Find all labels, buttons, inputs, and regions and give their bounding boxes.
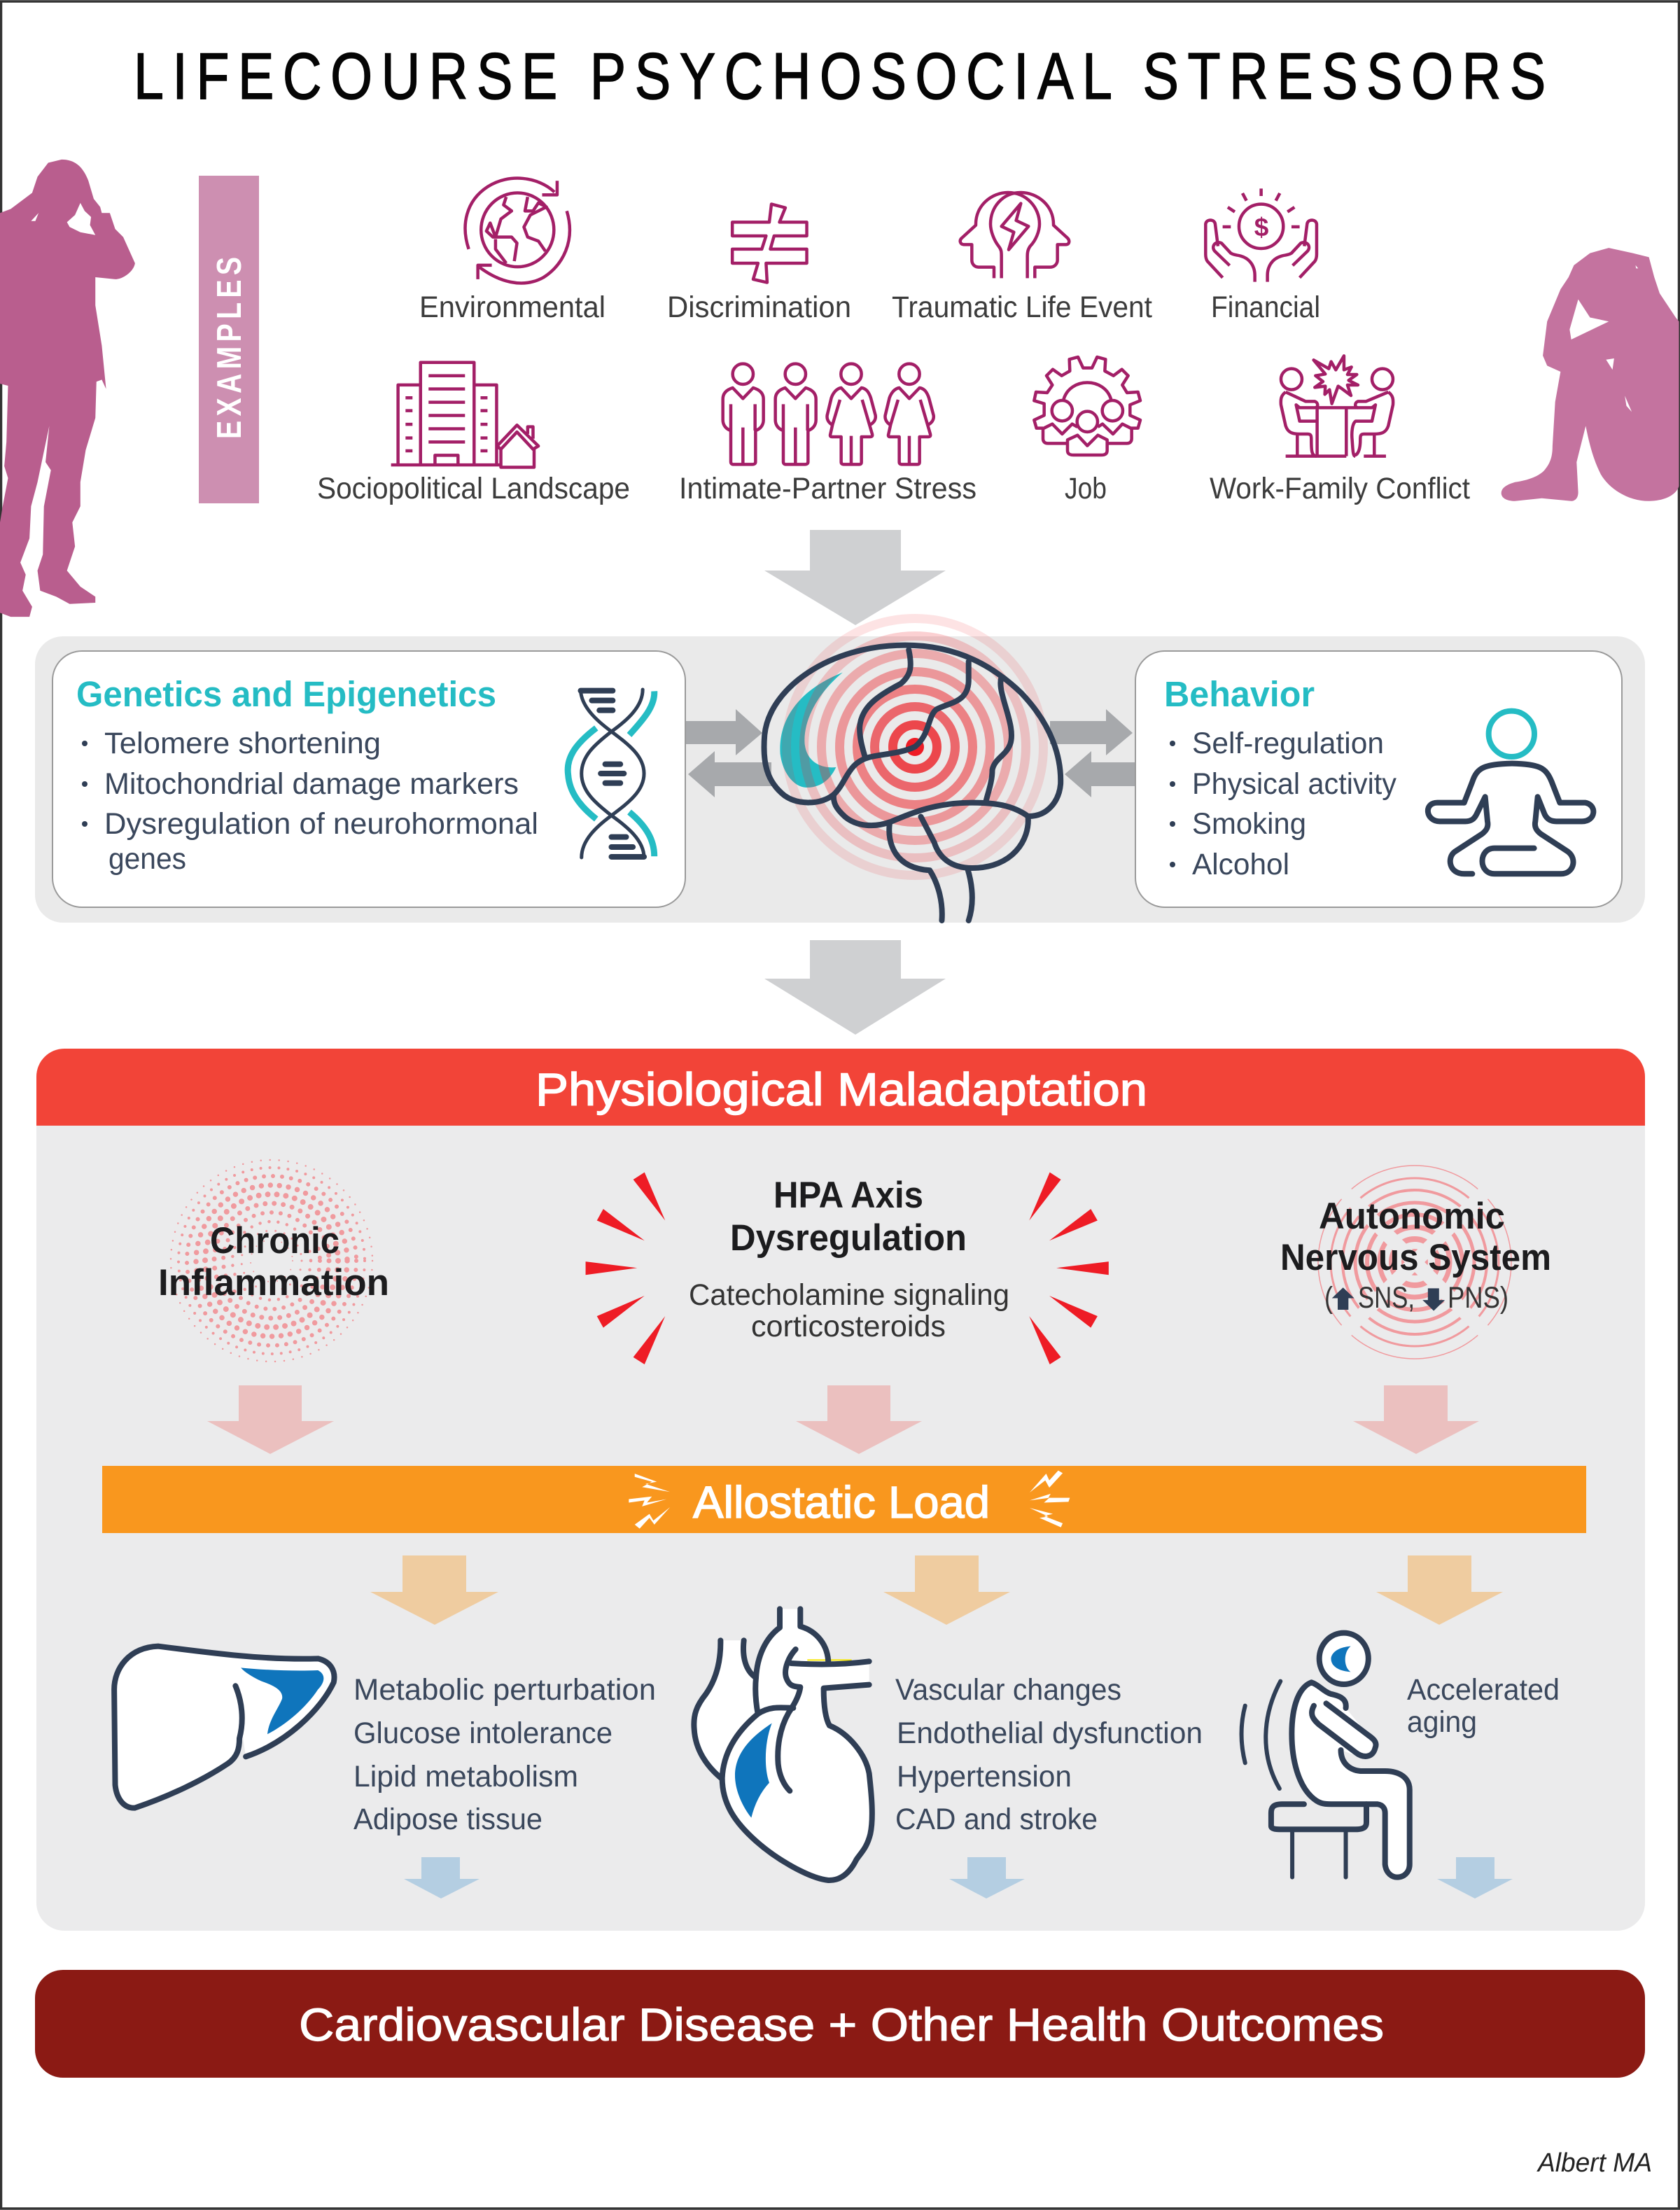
card: genetics and epigenetics [52, 651, 685, 907]
autonomic nervous system: ( [1324, 1281, 1334, 1315]
text: metabolic outcomes: Glucose intolerance [354, 1716, 612, 1750]
text: vascular outcomes [895, 1673, 1203, 1836]
hpa axis dysregulation: Dysregulation [730, 1217, 967, 1259]
list: behavior: Smoking [1192, 807, 1306, 841]
arrow: mediators to maladaptation [764, 940, 946, 1035]
icon: traumatic life event [960, 193, 1069, 278]
silhouette: standing person [0, 160, 135, 617]
arrows: to cardiovascular disease [404, 1857, 1513, 1898]
text: vascular outcomes: Hypertension [897, 1760, 1072, 1793]
hpa axis dysregulation [586, 1173, 1109, 1364]
heading: physiological maladaptation: Physiological Maladaptation [536, 1063, 1147, 1115]
label: financial: Financial [1211, 291, 1320, 324]
card: behavior [1135, 651, 1622, 907]
text: vascular outcomes: Endothelial dysfunction [897, 1716, 1203, 1750]
label: traumatic life event: Traumatic Life Event [892, 291, 1152, 324]
list: genetics [82, 727, 538, 876]
text: metabolic outcomes: Metabolic perturbation [354, 1673, 656, 1707]
autonomic nervous system: SNS, [1358, 1281, 1415, 1315]
icon: intimate-partner stress [723, 364, 934, 464]
up and down arrows [1332, 1287, 1445, 1310]
silhouette: seated person [1502, 248, 1679, 501]
icon: meditating person [1428, 711, 1593, 874]
label: work-family conflict: Work-Family Conflict [1210, 472, 1470, 505]
autonomic nervous system [1280, 1166, 1551, 1359]
header bar [36, 1049, 1645, 1126]
pulse rings [1318, 1166, 1511, 1359]
allostatic load band: Allostatic Load [693, 1477, 990, 1527]
icon: financial [1205, 188, 1317, 282]
label: discrimination: Discrimination [667, 291, 851, 324]
credit: Albert MA [1536, 2148, 1652, 2178]
list: behavior: Physical activity [1192, 767, 1396, 801]
heading: behavior: Behavior [1164, 674, 1315, 714]
list: behavior: Alcohol [1192, 848, 1289, 881]
title: LIFECOURSE PSYCHOSOCIAL STRESSORS [134, 40, 1546, 113]
panel: physiological maladaptation [36, 1049, 1645, 1931]
hpa axis dysregulation: corticosteroids [751, 1310, 946, 1343]
icon: dna [568, 690, 654, 858]
list: behavior [1170, 727, 1396, 881]
halftone dots [171, 1160, 372, 1362]
text: vascular outcomes: CAD and stroke [895, 1803, 1098, 1836]
brain outline [764, 645, 1060, 921]
text: vascular outcomes: Vascular changes [895, 1673, 1121, 1707]
chronic inflammation: Chronic [210, 1220, 340, 1261]
allostatic load band [102, 1466, 1586, 1533]
text: metabolic outcomes [354, 1673, 656, 1836]
icon: sociopolitical landscape [391, 363, 538, 468]
icon: liver [114, 1646, 334, 1808]
autonomic nervous system: Nervous System [1280, 1237, 1551, 1278]
chronic inflammation [158, 1160, 389, 1362]
icon: discrimination [732, 204, 807, 283]
heading: genetics: Genetics and Epigenetics [76, 674, 496, 714]
stress rings [787, 619, 1043, 875]
lightning bolts left [629, 1474, 670, 1529]
icon: environmental [465, 179, 570, 283]
lightning bolts right [1030, 1471, 1070, 1527]
list: genetics: genes [108, 842, 186, 876]
arrows: allostatic load to outcomes [370, 1555, 1503, 1625]
icon: work-family conflict [1281, 356, 1393, 456]
arrows: genetics and brain exchange [685, 709, 771, 797]
autonomic nervous system: Autonomic [1319, 1196, 1505, 1237]
outcome bar [35, 1970, 1645, 2078]
list: genetics: Dysregulation of neurohormonal [104, 807, 538, 841]
list: behavior: Self-regulation [1192, 727, 1384, 760]
icon: job [1034, 357, 1140, 455]
text: metabolic outcomes: Adipose tissue [354, 1803, 542, 1836]
outcome bar: Cardiovascular Disease + Other Health Outcomes [299, 1999, 1384, 2050]
examples bar [199, 176, 259, 503]
label: job: Job [1065, 472, 1107, 505]
list: genetics: Mitochondrial damage markers [104, 767, 519, 801]
hpa axis dysregulation: Catecholamine signaling [689, 1278, 1009, 1312]
chronic inflammation: Inflammation [158, 1262, 389, 1303]
icon: financial: $ [1254, 213, 1269, 242]
arrows: behavior and brain exchange [1050, 709, 1135, 797]
icon: heart [694, 1609, 872, 1880]
text: metabolic outcomes: Lipid metabolism [354, 1760, 578, 1793]
arrows: maladaptation to allostatic load [207, 1385, 1479, 1454]
arrow: stressors to brain [764, 530, 946, 625]
examples bar: EXAMPLES [211, 257, 248, 439]
hpa axis dysregulation: HPA Axis [774, 1175, 923, 1216]
amygdala highlight [780, 673, 843, 788]
label: intimate-partner stress: Intimate-Partner Stress [679, 472, 976, 505]
red spikes [586, 1173, 1109, 1364]
label: environmental: Environmental [419, 291, 606, 324]
label: sociopolitical landscape: Sociopolitical Landscape [317, 472, 630, 505]
icon: brain with stress rings [764, 619, 1060, 921]
text: accelerated aging [1407, 1673, 1560, 1739]
autonomic nervous system: PNS) [1448, 1281, 1508, 1315]
list: genetics: Telomere shortening [104, 727, 381, 760]
text: accelerated aging: Accelerated [1407, 1673, 1560, 1707]
text: accelerated aging: aging [1407, 1705, 1477, 1739]
icon: seated aging person [1241, 1633, 1410, 1877]
panel: mediators [35, 636, 1645, 923]
